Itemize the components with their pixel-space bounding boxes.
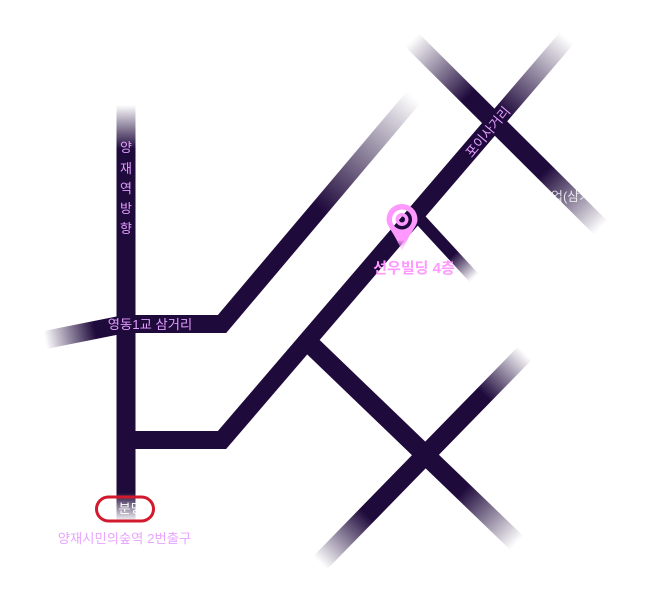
label: 양재역방향: 방 <box>120 201 132 216</box>
label: 업(삼거리): 업(삼거리) <box>551 189 608 204</box>
roads <box>45 32 605 565</box>
callout: 분당: 분당 <box>118 501 143 516</box>
label: 영동1교 삼거리: 영동1교 삼거리 <box>108 317 192 332</box>
label: 선우빌딩 4층: 선우빌딩 4층 <box>373 260 455 277</box>
label: 양재역방향 <box>120 140 132 236</box>
label: 양재역방향: 향 <box>120 221 132 236</box>
label: 양재역방향: 역 <box>120 181 132 196</box>
label: 양재역방향: 양 <box>120 140 132 155</box>
label: 양재역방향: 재 <box>120 161 132 176</box>
icon: map pin <box>386 204 418 252</box>
label: 양재시민의숲역 2번출구: 양재시민의숲역 2번출구 <box>58 531 191 546</box>
label: 포이사거리: 포이사거리 <box>463 104 513 160</box>
callout: 분당 <box>96 497 154 521</box>
